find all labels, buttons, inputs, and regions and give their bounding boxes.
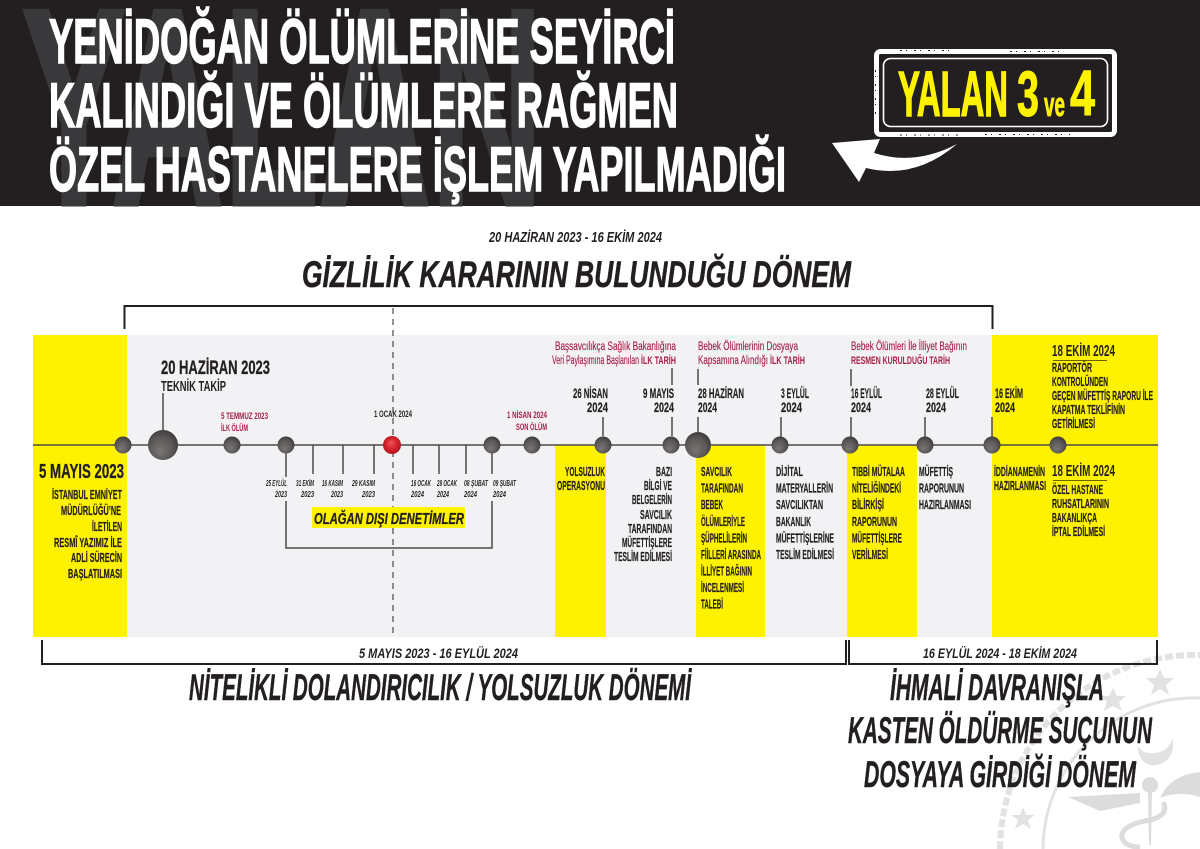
- small inspection dates: 08 ŞUBAT: [464, 479, 489, 488]
- text block: 18 Ekim 2024 ruhsat iptali: 18 EKİM 2024: [1052, 462, 1115, 480]
- red note: ilk tarih 2: Kapsamına Alındığı: [698, 355, 768, 367]
- title: KALINDIĞI VE ÖLÜMLERE RAĞMEN: [49, 71, 678, 141]
- text block: bilirkisi raporu: VERİLMESİ: [852, 547, 888, 562]
- text block: 5 Mayis 2023: RESMÎ YAZIMIZ İLE: [54, 535, 122, 550]
- text block: savcilik talebi: TARAFINDAN: [701, 482, 743, 496]
- text block: iddianame: [994, 464, 1046, 493]
- yellow column: 16-18 Ekim: [992, 335, 1158, 637]
- yellow column: savcilik: [696, 445, 765, 637]
- text block: bilirkisi raporu: MÜFETTİŞLERE: [852, 531, 902, 546]
- text block: bazi bilgi ve belgeler: TESLİM EDİLMESİ: [614, 549, 672, 564]
- label: 20 Haziran 2023: 20 HAZİRAN 2023: [161, 358, 270, 379]
- small inspection dates: 2023: [361, 490, 375, 499]
- text block: 18 Ekim 2024 ruhsat iptali: ÖZEL HASTANE: [1052, 482, 1103, 497]
- text block: iddianame: İDDİANAMENİN: [994, 464, 1045, 479]
- label: ilk olum: 5 TEMMUZ 2023: [221, 411, 268, 422]
- text block: bilirkisi raporu: NİTELİĞİNDEKİ: [852, 481, 901, 496]
- text block: 18 Ekim 2024 kapatma teklifi: 18 EKİM 2024: [1052, 342, 1115, 360]
- text block: savcilik talebi: FİİLLERİ ARASINDA: [701, 547, 761, 562]
- text block: dijital materyaller: MÜFETTİŞLERİNE: [776, 531, 834, 546]
- badge: Yalan 3 ve 4: 4: [1070, 57, 1095, 129]
- title: YENİDOĞAN ÖLÜMLERİNE SEYİRCİ: [49, 7, 675, 77]
- text block: mufettis raporu: RAPORUNUN: [919, 482, 964, 496]
- date range: dolandiricilik period: 5 MAYIS 2023 - 16 EYLÜL 2024: [359, 645, 518, 661]
- text block: savcilik talebi: BEBEK: [701, 498, 723, 512]
- red note: resmen kuruldugu tarih: Bebek Ölümleri İle İlliyet Bağının: [851, 340, 967, 353]
- yellow column: 5 Mayis: [33, 335, 127, 637]
- red note: ilk tarih 1: Başsavcılıkça Sağlık Bakanlığına: [555, 341, 676, 353]
- dates above the axis: 2024: [851, 400, 871, 415]
- label: ilk olum: [221, 411, 268, 434]
- label: son olum: 1 NİSAN 2024: [507, 410, 547, 421]
- small inspection dates: [265, 479, 517, 499]
- text block: bazi bilgi ve belgeler: BAZI: [656, 465, 672, 479]
- text block: savcilik talebi: İNCELENMESİ: [701, 580, 744, 595]
- text block: 5 Mayis 2023: [39, 461, 124, 581]
- heading: secrecy period: GİZLİLİK KARARININ BULUNDUĞU DÖNEM: [302, 253, 852, 295]
- small inspection dates: 2023: [274, 490, 287, 499]
- red note: resmen kuruldugu tarih: [851, 340, 967, 367]
- text block: savcilik talebi: ŞÜPHELİLERİN: [701, 531, 747, 546]
- text block: 5 Mayis 2023: İSTANBUL EMNİYET: [52, 487, 122, 502]
- small inspection dates: 2023: [300, 490, 314, 499]
- text block: 18 Ekim 2024 kapatma teklifi: [1052, 342, 1153, 431]
- dates above the axis: 3 EYLÜL: [781, 386, 809, 401]
- dates above the axis: 9 MAYIS: [643, 386, 674, 401]
- text block: 18 Ekim 2024 ruhsat iptali: [1052, 462, 1115, 539]
- date range: ihmali davranis period: 16 EYLÜL 2024 - 18 EKİM 2024: [923, 645, 1077, 661]
- header band: [0, 0, 1200, 264]
- text: BELGELERİN: [632, 492, 672, 507]
- text block: bilirkisi raporu: [852, 464, 905, 562]
- text block: savcilik talebi: SAVCILIK: [701, 465, 732, 479]
- text block: mufettis raporu: HAZIRLANMASI: [919, 498, 971, 512]
- text block: dijital materyaller: BAKANLIK: [776, 515, 811, 529]
- text block: savcilik talebi: İLLİYET BAĞININ: [701, 564, 752, 579]
- text block: 18 Ekim 2024 ruhsat iptali: RUHSATLARININ: [1052, 497, 1109, 511]
- timeline axis with ticks: [33, 368, 1158, 548]
- text block: 18 Ekim 2024 kapatma teklifi: KONTROLÜNDEN: [1052, 374, 1108, 389]
- red note: ilk tarih 2: [698, 341, 805, 367]
- dates above the axis: 16 EYLÜL: [851, 386, 882, 401]
- text block: 18 Ekim 2024 kapatma teklifi: KAPATMA TEKLİFİNİN: [1052, 402, 1125, 417]
- red note: ilk tarih 1: Veri Paylaşımına Başlanılan: [552, 355, 639, 367]
- small inspection dates: 2024: [436, 490, 449, 499]
- dates above the axis: 2024: [995, 400, 1015, 415]
- text block: 18 Ekim 2024 kapatma teklifi: GETİRİLMESİ: [1052, 416, 1095, 431]
- text block: bilirkisi raporu: BİLİRKİŞİ: [852, 497, 884, 512]
- label: ilk olum: İLK ÖLÜM: [221, 423, 248, 434]
- text block: 5 Mayis 2023: 5 MAYIS 2023: [39, 461, 124, 483]
- highlight label: olagan disi denetimler: [312, 507, 465, 528]
- small inspection dates: 2024: [492, 490, 506, 499]
- date range: secrecy period: 20 HAZİRAN 2023 - 16 EKİM 2024: [488, 229, 662, 246]
- dates above the axis: 2024: [698, 400, 717, 415]
- small inspection dates: 2023: [330, 490, 343, 499]
- dashed marker: 1 Ocak 2024: [392, 308, 394, 637]
- label: 20 Haziran 2023: TEKNİK TAKİP: [161, 378, 226, 395]
- dates above the axis: 2024: [587, 400, 608, 415]
- text block: savcilik talebi: TALEBİ: [701, 597, 723, 612]
- yellow column: bilirkisi: [847, 445, 917, 637]
- text block: mufettis raporu: [919, 464, 971, 512]
- red note: ilk tarih 2: Bebek Ölümlerinin Dosyaya: [698, 341, 798, 353]
- small inspection dates: 16 OCAK: [411, 479, 432, 488]
- text block: mufettis raporu: MÜFETTİŞ: [919, 464, 953, 479]
- bracket: dolandiricilik period: [42, 640, 846, 664]
- dates above the axis: 26 NİSAN: [573, 386, 608, 401]
- text block: bilirkisi raporu: TIBBİ MÜTALAA: [852, 464, 905, 479]
- small inspection dates: 28 OCAK: [436, 479, 458, 488]
- yellow column: operasyon: [555, 445, 606, 637]
- label: 1 Ocak 2024: 1 OCAK 2024: [374, 409, 412, 420]
- title: [49, 7, 786, 205]
- text block: savcilik talebi: ÖLÜMLERİYLE: [701, 514, 745, 529]
- text block: yolsuzluk operasyonu: OPERASYONU: [557, 479, 605, 493]
- label: son olum: SON ÖLÜM: [516, 422, 547, 433]
- dates above the axis: 28 HAZİRAN: [698, 386, 744, 401]
- red note: resmen kuruldugu tarih: RESMEN KURULDUĞU TARİH: [851, 354, 950, 367]
- small inspection dates: 09 ŞUBAT: [493, 479, 517, 488]
- timeline nodes: [114, 430, 1066, 460]
- text block: bazi bilgi ve belgeler: TARAFINDAN: [628, 522, 672, 536]
- small inspection dates: 16 KASIM: [322, 479, 343, 488]
- text block: yolsuzluk operasyonu: YOLSUZLUK: [565, 465, 605, 479]
- badge: Yalan 3 ve 4: 3: [1017, 58, 1039, 130]
- text block: bazi bilgi ve belgeler: MÜFETTİŞLERE: [622, 535, 672, 550]
- text block: 18 Ekim 2024 ruhsat iptali: BAKANLIKÇA: [1052, 511, 1097, 525]
- text block: dijital materyaller: DİJİTAL: [776, 464, 803, 479]
- dates above the axis: [573, 386, 1023, 415]
- bracket: secrecy period: [124, 306, 992, 329]
- text block: dijital materyaller: MATERYALLERİN: [776, 481, 833, 496]
- text block: 5 Mayis 2023: MÜDÜRLÜĞÜ’NE: [61, 503, 121, 518]
- dates above the axis: 28 EYLÜL: [926, 386, 959, 401]
- red note: ilk tarih 1: İLK TARİH: [641, 354, 676, 367]
- label: 20 Haziran 2023: [161, 358, 270, 395]
- small inspection dates: 31 EKİM: [296, 479, 314, 488]
- text block: 5 Mayis 2023: BAŞLATILMASI: [68, 567, 122, 581]
- text block: bazi bilgi ve belgeler: BİLGİ VE: [644, 478, 672, 493]
- small inspection dates: 2024: [410, 490, 424, 499]
- text block: savcilik talebi: [701, 465, 761, 612]
- watermark: ministry seal: [1000, 160, 1200, 849]
- small inspection dates: 25 EYLÜL: [265, 479, 287, 488]
- dates above the axis: 16 EKİM: [995, 386, 1023, 401]
- badge: Yalan 3 ve 4: ve: [1044, 86, 1065, 124]
- text block: 5 Mayis 2023: İLETİLEN: [92, 519, 122, 534]
- text block: yolsuzluk operasyonu: [557, 465, 605, 493]
- text block: dijital materyaller: SAVCILIKTAN: [776, 498, 823, 512]
- bracket: ihmali davranis period: [849, 640, 1157, 664]
- dates above the axis: 2024: [926, 400, 946, 415]
- text block: dijital materyaller: TESLİM EDİLMESİ: [776, 547, 834, 562]
- highlight label: olagan disi denetimler: OLAĞAN DIŞI DENETİMLER: [314, 509, 464, 528]
- text block: bilirkisi raporu: RAPORUNUN: [852, 515, 897, 529]
- arrow: [832, 139, 957, 182]
- dates above the axis: 2024: [654, 400, 674, 415]
- timeline panel background: [33, 335, 1158, 637]
- dates above the axis: 2024: [781, 400, 802, 415]
- text block: 18 Ekim 2024 kapatma teklifi: RAPORTÖR: [1052, 360, 1092, 375]
- label: son olum: [507, 410, 547, 433]
- red note: ilk tarih 2: İLK TARİH: [770, 354, 805, 367]
- text block: iddianame: HAZIRLANMASI: [994, 479, 1046, 493]
- small inspection dates: 2024: [463, 490, 477, 499]
- red note: ilk tarih 1: [552, 341, 676, 367]
- text block: bazi bilgi ve belgeler: [614, 465, 672, 564]
- heading: ihmali davranis period: [848, 667, 1153, 795]
- text block: bazi bilgi ve belgeler: SAVCILIK: [640, 508, 672, 522]
- text block: 18 Ekim 2024 ruhsat iptali: İPTAL EDİLMESİ: [1052, 524, 1105, 539]
- text block: dijital materyaller: [776, 464, 834, 562]
- heading: dolandiricilik period: NİTELİKLİ DOLANDIRICILIK / YOLSUZLUK DÖNEMİ: [189, 667, 692, 708]
- small inspection dates: 29 KASIM: [351, 479, 375, 488]
- badge: Yalan 3 ve 4: YALAN: [898, 58, 1008, 130]
- text block: 5 Mayis 2023: ADLİ SÜRECİN: [71, 550, 122, 565]
